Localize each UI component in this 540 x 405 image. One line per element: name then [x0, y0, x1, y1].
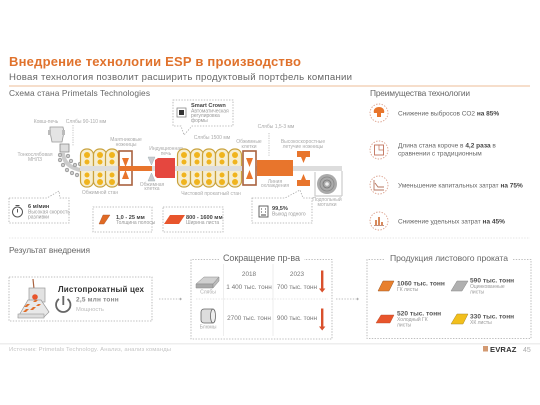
- source note: Источник: Primetals Technology. Анализ, анализ команды: [9, 347, 171, 353]
- label: blooms: Блюмы: [200, 324, 217, 330]
- label: cooling line: охлаждения: [261, 183, 289, 189]
- advantage: emissions: [370, 104, 499, 122]
- label: finishing mill: Чистовой прокатный стан: [181, 190, 241, 197]
- label: flying shears: летучие ножницы: [283, 144, 324, 150]
- label: roughing mill: Обжимной стан: [82, 189, 118, 196]
- panel: process scheme: [17, 119, 342, 208]
- blooms values: 2700 тыс. тонн: [227, 315, 271, 322]
- reduction title: Сокращение пр-ва: [223, 253, 300, 263]
- page number: 45: [523, 347, 531, 354]
- slabs values: 700 тыс. тонн: [277, 284, 318, 291]
- label: flying shears: Высокоскоростные: [281, 139, 325, 145]
- years: 2023: [290, 271, 305, 278]
- label: slabs 1.5-3: Слябы 1,5-3 мм: [258, 124, 295, 130]
- cooling line: [257, 160, 293, 176]
- edger triangles: [148, 157, 155, 181]
- flying shears: [297, 151, 310, 186]
- advantage: mill length: Длина стана короче в 4,2 раза в: [398, 142, 496, 150]
- label: edger: Обжимная: [140, 182, 165, 188]
- induction furnace: [155, 158, 175, 178]
- smart crown text: Smart Crown: [191, 103, 226, 109]
- advantage: unit costs: [370, 212, 505, 230]
- slabs values: 1 400 тыс. тонн: [226, 284, 272, 291]
- label: edging stands: Обжимные: [236, 139, 262, 145]
- roughing stands: [80, 149, 120, 187]
- smart crown text: формы: [191, 118, 208, 124]
- advantage: mill length: сравнении с традиционным: [398, 150, 482, 158]
- icon: caster rollers: [58, 152, 82, 177]
- product: galvanized: Оцинкованные: [470, 284, 505, 290]
- speed text: разливки: [28, 214, 49, 220]
- heading: result: Результат внедрения: [9, 245, 90, 255]
- blooms values: 900 тыс. тонн: [277, 315, 318, 322]
- label: thin slab caster: МНЛЗ: [28, 157, 42, 163]
- product: cold hot-rolled: [376, 310, 441, 328]
- label: thin slab caster: Тонкослябовая: [17, 152, 53, 158]
- label: slabs 1500: Слябы 1500 мм: [194, 135, 231, 141]
- smart crown text: регулировка: [191, 113, 220, 119]
- icon: red sheet: [164, 215, 185, 224]
- heading: mill scheme: Схема стана Primetals Technologies: [9, 88, 150, 98]
- advantage: unit costs: Снижение удельных затрат на 45%: [398, 218, 505, 226]
- product: galvanized: [451, 278, 514, 296]
- icon: stopwatch: [12, 206, 22, 217]
- product: hot rolled: 1060 тыс. тонн: [397, 280, 445, 288]
- product: cold rolled: 330 тыс. тонн: [470, 314, 514, 320]
- icon: orange sheet: [99, 215, 110, 224]
- product: hot rolled: ГК листы: [397, 287, 419, 293]
- capacity: 2,5 млн тонн: [76, 296, 119, 304]
- icon: chip: [177, 108, 186, 117]
- panel: rolling shop: [9, 277, 152, 321]
- label: coiler: Подпольный: [312, 196, 342, 203]
- advantage: capital costs: Уменьшение капитальных затрат на 75%: [398, 182, 523, 190]
- arrow: to reduction: [159, 298, 182, 300]
- label: slabs 90-110: Слябы 90-110 мм: [66, 119, 107, 125]
- label: edging stands: клетки: [241, 144, 257, 150]
- yield text: Выход годного: [272, 212, 306, 218]
- icon: power: [56, 296, 70, 312]
- thickness text: Толщина полосы: [116, 220, 156, 226]
- list: advantages: [370, 104, 523, 230]
- product: cold hot-rolled: листы: [397, 322, 412, 328]
- yield text: 99,5%: [272, 206, 288, 212]
- callout: width: [163, 207, 223, 232]
- label: slabs: Слябы: [200, 290, 216, 296]
- panel: production reduction: [191, 253, 332, 339]
- subtitle: Новая технология позволит расширить продуктовый портфель компании: [9, 72, 352, 83]
- finishing stands: [175, 149, 243, 187]
- label: edger: клетка: [144, 186, 160, 192]
- icon: yield: [259, 206, 268, 217]
- callout: smart crown: [173, 100, 233, 135]
- arrow: slabs decline: [319, 270, 325, 292]
- capacity label: Мощность: [76, 307, 104, 313]
- product: cold rolled: [451, 314, 514, 326]
- edging stand: [243, 151, 256, 185]
- icon: coiler: [315, 171, 342, 196]
- advantage: mill length: [370, 141, 496, 159]
- icon: slab: [196, 277, 219, 288]
- label: induction furnace: печь: [161, 151, 172, 157]
- strand line: [80, 166, 342, 171]
- panel: sheet products: [367, 253, 531, 338]
- width text: Ширина листа: [186, 220, 219, 226]
- shop name: Листопрокатный цех: [58, 285, 145, 294]
- callout: yield: [252, 190, 312, 223]
- logo: EVRAZ: EVRAZ: [490, 345, 517, 354]
- callout: casting speed: [9, 191, 70, 223]
- width text: 800 - 1600 мм: [186, 215, 223, 221]
- heading: advantages: Преимущества технологии: [370, 88, 470, 98]
- icon: plant: [18, 279, 49, 318]
- label: cooling line: Линия: [268, 179, 282, 185]
- products title: Продукция листового проката: [390, 253, 508, 263]
- product: galvanized: листы: [470, 290, 485, 296]
- product: cold hot-rolled: Холодный ГК: [397, 316, 428, 323]
- arrow: blooms decline: [319, 308, 325, 330]
- advantage: emissions: Снижение выбросов СО2 на 85%: [398, 110, 499, 118]
- product: galvanized: 590 тыс. тонн: [470, 278, 514, 284]
- callout: thickness: [93, 207, 156, 232]
- advantage: capital costs: [370, 176, 523, 194]
- speed text: Высокая скорость: [28, 210, 70, 216]
- label: crop shears: Маятниковые: [110, 137, 142, 143]
- speed text: 6 м/мин: [28, 204, 49, 210]
- smart crown text: Автоматическая: [191, 108, 229, 114]
- years: 2018: [242, 271, 257, 278]
- title: Внедрение технологии ESP в производство: [9, 54, 301, 69]
- label: ladle furnace: Ковш-печь: [34, 119, 59, 125]
- product: cold hot-rolled: 520 тыс. тонн: [397, 310, 441, 318]
- label: induction furnace: Индукционная: [149, 146, 183, 152]
- product: cold rolled: ХК листы: [470, 320, 492, 326]
- thickness text: 1,0 - 25 мм: [116, 215, 145, 221]
- arrow: to products: [336, 298, 359, 300]
- label: coiler: моталки: [317, 202, 337, 208]
- icon: bloom: [201, 309, 216, 323]
- icon: ladle: [48, 127, 69, 152]
- label: crop shears: ножницы: [116, 142, 137, 148]
- product: hot rolled: [378, 280, 445, 293]
- pendulum shear: [119, 151, 152, 185]
